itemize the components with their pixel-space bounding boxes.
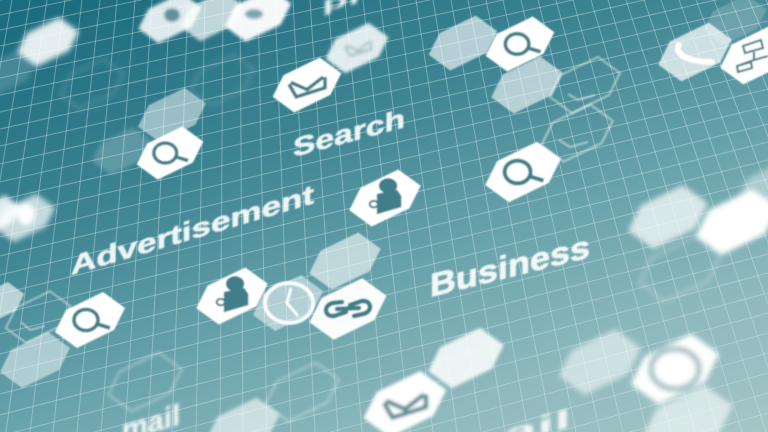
icon: link	[326, 301, 370, 316]
cluster: search hexagons top centre	[429, 16, 563, 114]
cluster: mail hexagons top	[326, 23, 388, 73]
cluster: bottom left search hexagons	[0, 282, 125, 388]
icon: phone	[678, 45, 712, 62]
icon: search hexagon centre	[485, 142, 561, 202]
cluster: left edge blurred hexagons	[0, 194, 55, 242]
cluster: top blurred hexagons	[138, 0, 291, 43]
icon: mail hexagon top	[273, 58, 341, 112]
icon: search hexagon	[137, 126, 203, 180]
icon: person hexagon centre	[349, 169, 421, 227]
cluster: search hexagon group upper left	[92, 88, 206, 180]
label: Business: Business	[430, 229, 590, 304]
label: Advertisement: Advertisement	[71, 179, 314, 281]
cluster: bottom centre blurred hexagons	[206, 328, 504, 432]
cluster: bottom right blurred hexagons	[559, 329, 733, 432]
cluster: top left blurred hexagons	[0, 17, 254, 109]
outline hexagons bottom centre	[108, 353, 339, 421]
icon: org chart	[737, 40, 768, 72]
cluster: phone and org chart hexagons	[658, 0, 768, 84]
cluster: right blurred hexagons	[628, 160, 768, 301]
icon: clock	[265, 283, 313, 323]
cluster: person, clock and link hexagons	[196, 232, 386, 340]
outline hexagons with check marks	[541, 57, 620, 162]
label: Search: Search	[293, 103, 405, 163]
